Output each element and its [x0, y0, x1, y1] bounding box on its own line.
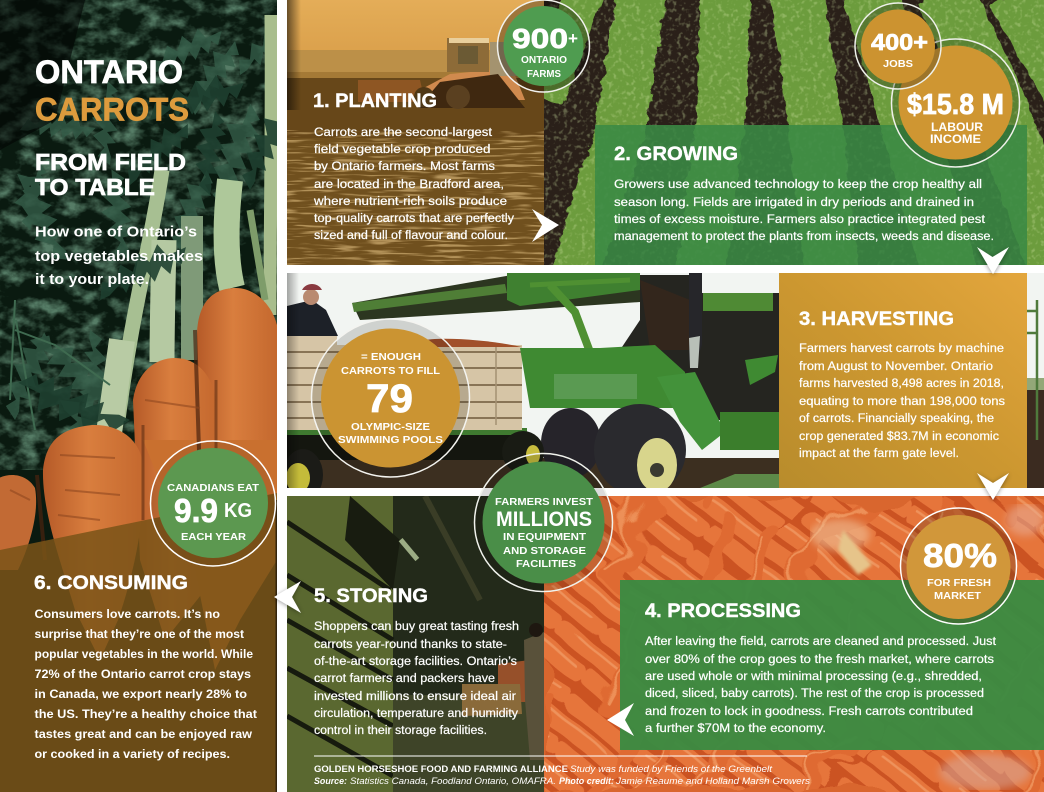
text: harvesting body — [799, 341, 1005, 460]
callout: 900+ ontario farms: + — [568, 29, 578, 48]
heading: 1. planting: 1. PLANTING — [313, 90, 437, 112]
panel: harvesting — [283, 273, 1044, 501]
callout: canadians eat 9.9 kg: EACH YEAR — [181, 531, 246, 543]
text: planting body: by Ontario farmers. Most farms — [314, 159, 495, 173]
callout: canadians eat 9.9 kg: CANADIANS EAT — [167, 482, 260, 494]
callout: canadians eat 9.9 kg: 9.9 — [174, 492, 218, 529]
photo: carrots — [544, 496, 1044, 792]
arrow: processing to storing — [607, 703, 634, 736]
machine dark interior — [620, 275, 779, 420]
text: processing body: diced, sliced, baby carrots). The rest of the crop is processed — [645, 686, 984, 700]
text: planting body — [313, 125, 515, 242]
heading: 6. consuming: 6. CONSUMING — [34, 572, 188, 594]
heading: 2. growing: 2. GROWING — [614, 143, 738, 165]
photo: tractor in field — [287, 0, 544, 265]
footer credits: Source: — [314, 776, 347, 787]
callout: 900+ ontario farms: 900 — [512, 23, 568, 54]
text: planting body: top-quality carrots that are perfectly — [314, 211, 515, 225]
panel: planting — [287, 0, 544, 265]
far right of photo — [1027, 300, 1044, 488]
callout: 79 swimming pools: CARROTS TO FILL — [341, 365, 441, 377]
text: harvesting body: crop generated $83.7M in economic — [799, 429, 999, 443]
panel: processing text box — [620, 580, 1044, 750]
text: consuming body: tastes great and can be enjoyed raw — [34, 727, 252, 741]
callout: canadians eat 9.9 kg: KG — [224, 500, 252, 522]
text: consuming body: 72% of the Ontario carrot crop stays — [34, 667, 251, 681]
arrow: storing to consuming — [274, 581, 301, 613]
callout: canadians eat 9.9 kg — [150, 441, 276, 566]
text: storing body: carrots year-round thanks to state- — [314, 637, 507, 651]
text: consuming body: popular vegetables in the world. While — [34, 647, 253, 661]
footer credits: Study was funded by Friends of the Greenbelt — [570, 764, 772, 775]
photo: storage facility — [287, 496, 544, 792]
callout: 900+ ontario farms — [498, 0, 590, 92]
tires — [287, 404, 779, 488]
text: planting body: Carrots are the second-largest — [314, 125, 493, 139]
text: planting body: where nutrient-rich soils produce — [313, 194, 507, 208]
text: processing body: over 80% of the crop goes to the fresh market, where carrots — [645, 652, 994, 666]
text: storing body: of-the-art storage facilities. Ontario’s — [314, 654, 517, 668]
text: storing body: carrot farmers and packers have — [314, 671, 495, 685]
text: consuming body: in Canada, we export nearly 28% to — [34, 687, 247, 701]
text: consuming body: or cooked in a variety of recipes. — [34, 747, 230, 761]
text: harvesting body: from August to November. Ontario — [799, 359, 993, 373]
text: harvesting body: Farmers harvest carrots by machine — [799, 341, 1004, 355]
callout: farmers invest millions: MILLIONS — [496, 508, 592, 531]
callout: 400+ jobs: JOBS — [883, 58, 913, 70]
conveyor — [352, 273, 640, 352]
worker — [287, 284, 338, 336]
callout: $15.8 m labour income: $15.8 M — [907, 89, 1004, 121]
text: growing body: times of excess moisture. Farmers also practice integrated pest — [614, 212, 986, 226]
panel: harvesting text box — [779, 273, 1027, 488]
carrots — [0, 288, 277, 670]
footer credits: GOLDEN HORSESHOE FOOD AND FARMING ALLIANCE — [314, 764, 569, 775]
panel: processing — [544, 496, 1044, 792]
subtitle — [35, 224, 203, 288]
footer credits: Statistics Canada, Foodland Ontario, OMAFRA. — [350, 776, 556, 787]
callout: 80% for fresh market: MARKET — [934, 590, 982, 602]
heading: 3. harvesting: 3. HARVESTING — [799, 308, 954, 330]
callout: farmers invest millions: IN EQUIPMENT — [503, 531, 587, 543]
footer credits: Jamie Reaume and Holland Marsh Growers — [615, 776, 810, 787]
text: storing body: control in their storage facilities. — [314, 723, 487, 737]
subtitle: How one of Ontario’s — [35, 224, 197, 240]
brown overlay panel — [0, 493, 277, 792]
callout: 79 swimming pools: 79 — [366, 377, 413, 421]
photo: carrot rows — [544, 0, 1044, 275]
heading: 5. storing: 5. STORING — [314, 585, 428, 607]
text: growing body: management to protect the plants from insects, weeds and disease. — [614, 229, 994, 243]
text: harvesting body: impact at the farm gate level. — [799, 446, 959, 460]
title: ONTARIO — [35, 54, 183, 90]
text: storing body: invested millions to ensure ideal air — [314, 689, 516, 703]
text: planting body: field vegetable crop produced — [314, 142, 490, 156]
arrow: harvesting to processing — [977, 473, 1009, 500]
heading: 4. processing: 4. PROCESSING — [645, 600, 801, 622]
text: consuming body: the US. They’re a healthy choice that — [34, 707, 257, 721]
title: TO TABLE — [35, 174, 155, 200]
footer credits: Photo credit: — [559, 776, 614, 787]
title: CARROTS — [35, 92, 189, 128]
callout: $15.8 m labour income: LABOUR — [931, 120, 983, 134]
callout: $15.8 m labour income: INCOME — [930, 132, 981, 146]
callout: 79 swimming pools — [312, 319, 470, 477]
foliage photo — [0, 0, 307, 792]
text: consuming body — [34, 607, 257, 761]
callout: 80% for fresh market: FOR FRESH — [927, 577, 991, 589]
text: storing body: circulation, temperature and humidity — [314, 706, 519, 720]
callout: 80% for fresh market — [900, 508, 1016, 624]
text: processing body: are used whole or with minimal processing (e.g., shredded, — [645, 669, 982, 683]
callout: 79 swimming pools: = ENOUGH — [361, 351, 421, 363]
text: growing body — [614, 177, 994, 243]
text: harvesting body: farms harvested 8,498 acres in 2018, — [799, 376, 1004, 390]
arrow: growing to harvesting — [977, 247, 1009, 274]
panel: carrots photo and consuming — [0, 0, 307, 792]
text: planting body: are located in the Bradford area, — [314, 177, 504, 191]
text: harvesting body: equating to more than 198,000 tons — [799, 394, 1005, 408]
subtitle: top vegetables makes — [35, 249, 203, 265]
arrow: planting to growing — [532, 209, 559, 242]
text: growing body: Growers use advanced technology to keep the crop healthy all — [614, 177, 982, 191]
photo: harvester — [283, 273, 1044, 501]
text: growing body: season long. Fields are irrigated in dry periods and drained in — [614, 195, 974, 209]
callout: farmers invest millions: AND STORAGE — [503, 545, 586, 557]
crates — [287, 335, 522, 430]
footer credits — [314, 756, 810, 787]
callout: 900+ ontario farms: ONTARIO — [521, 54, 567, 66]
panel: storing — [287, 496, 544, 792]
text: processing body: and frozen to lock in goodness. Fresh carrots contributed — [645, 704, 973, 718]
title — [35, 54, 189, 200]
text: consuming body: surprise that they’re one of the most — [34, 627, 244, 641]
text: harvesting body: of carrots. Financially speaking, the — [799, 411, 994, 425]
callout: $15.8 m labour income — [892, 39, 1020, 167]
panel: growing — [544, 0, 1044, 275]
text: planting body: sized and full of flavour and colour. — [314, 228, 508, 242]
callout: farmers invest millions: FARMERS INVEST — [495, 496, 594, 508]
callout: 400+ jobs: 400+ — [871, 29, 928, 55]
text: consuming body: Consumers love carrots. It’s no — [34, 607, 220, 621]
panel: growing text box — [595, 125, 1027, 265]
subtitle: it to your plate. — [35, 272, 149, 288]
callout: 79 swimming pools: SWIMMING POOLS — [338, 434, 443, 446]
text: processing body — [645, 634, 997, 735]
callout: 400+ jobs — [855, 3, 941, 89]
green body — [520, 345, 779, 450]
text: storing body — [314, 619, 519, 737]
text: storing body: Shoppers can buy great tasting fresh — [314, 619, 519, 633]
callout: farmers invest millions — [474, 454, 612, 592]
text: processing body: After leaving the field, carrots are cleaned and processed. Just — [645, 634, 997, 648]
title: FROM FIELD — [35, 149, 186, 175]
callout: 79 swimming pools: OLYMPIC-SIZE — [351, 421, 430, 433]
callout: 80% for fresh market: 80% — [923, 537, 997, 574]
callout: farmers invest millions: FACILITIES — [516, 558, 576, 570]
text: processing body: a further $70M to the economy. — [645, 721, 826, 735]
callout: 900+ ontario farms: FARMS — [527, 68, 561, 80]
